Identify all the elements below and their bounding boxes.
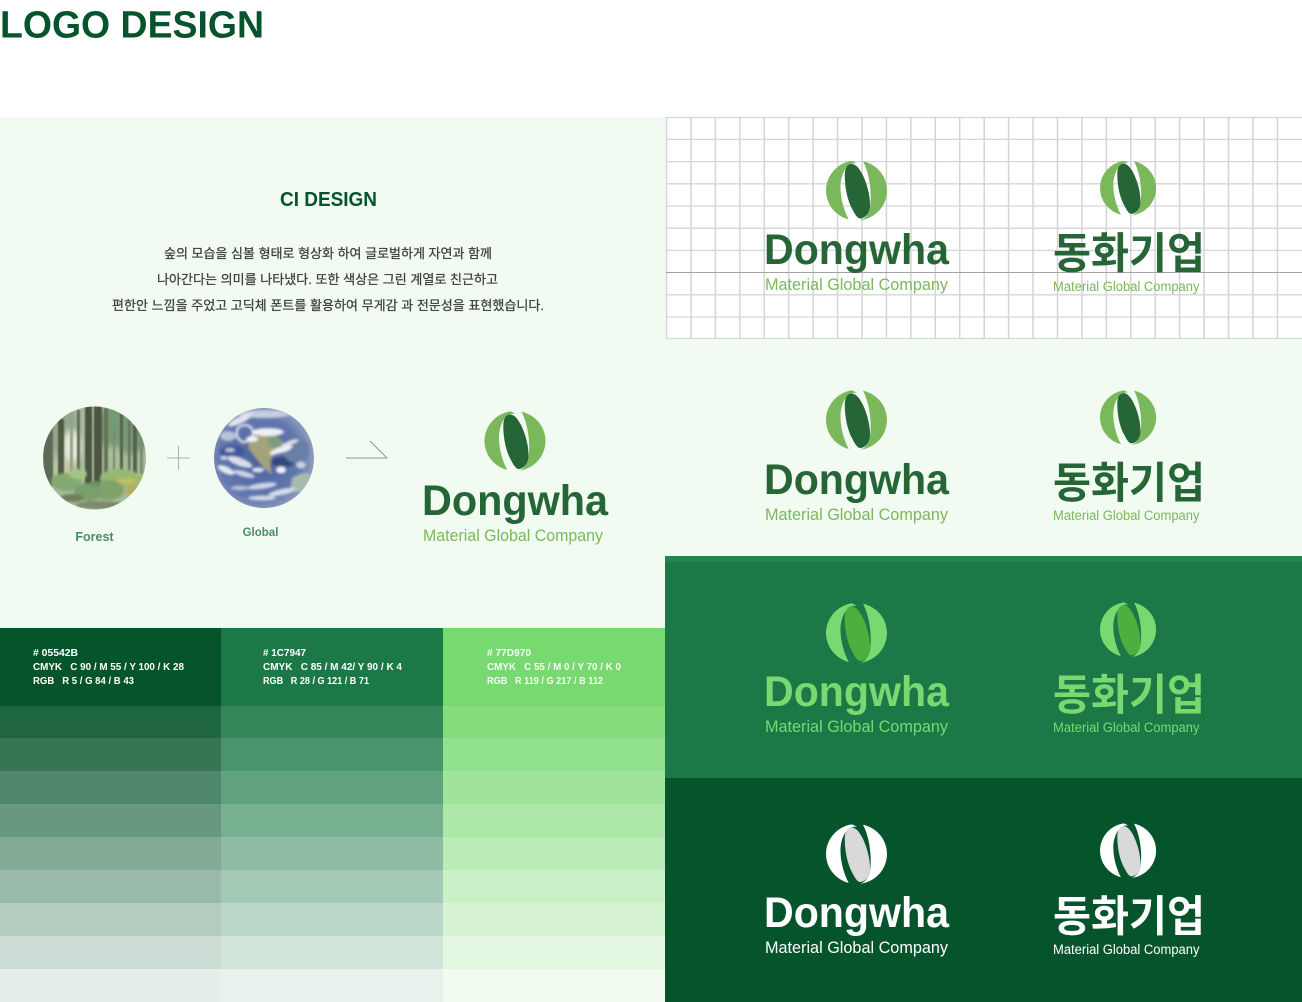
logo: korean on grid: 동화기업 [1053,230,1205,278]
label: forest: Forest [75,530,114,544]
logo: korean on mid green: Material Global Company [1053,720,1200,735]
panel: logo on pale green [665,339,1302,556]
logo: english on grid: Dongwha [764,226,950,274]
text block: description: 숲의 모습을 심볼 형태로 형상화 하여 글로벌하게 자연과 함께 [164,246,492,261]
logo: korean on pale green: 동화기업 [1053,460,1205,508]
swatch column: mid green: RGB R 28 / G 121 / B 71 [263,676,369,687]
swatch column: mid green: CMYK C 85 / M 42/ Y 90 / K 4 [263,662,402,673]
logo: korean on grid: Material Global Company [1053,279,1200,294]
logo: combined result [422,411,609,545]
text block: description: 나아간다는 의미를 나타냈다. 또한 색상은 그린 계열로 친근하고 [157,272,498,287]
logo: english on dark green [764,824,950,957]
logo: english on mid green: Dongwha [764,668,950,716]
logo: korean on dark green: Material Global Company [1053,942,1200,957]
swatch column: dark green: # 05542B [33,648,78,659]
text block: description: 편한안 느낌을 주었고 고딕체 폰트를 활용하여 무게감 과 전문성을 표현했습니다. [112,298,544,313]
logo: english on grid [764,161,950,294]
logo: korean on pale green: Material Global Company [1053,508,1200,523]
heading: CI design: CI DESIGN [280,189,377,211]
panel: CI design [0,117,665,628]
logo: combined result: Material Global Company [423,527,604,545]
panel: logo on mid green [665,556,1302,778]
logo: english on pale green [764,390,950,524]
image: earth [214,408,314,508]
text block: description [112,246,544,313]
swatch column: mid green [221,628,443,1002]
logo: korean on grid [1053,161,1205,294]
swatch column: light green [443,628,665,1002]
logo: korean on pale green [1053,390,1205,523]
swatch column: dark green: CMYK C 90 / M 55 / Y 100 / K 28 [33,662,184,673]
logo: korean on mid green [1053,602,1205,735]
icon: arrow [346,441,387,458]
panel: color palette [0,628,665,1002]
logo: english on pale green: Dongwha [764,456,950,504]
logo: korean on dark green [1053,823,1205,957]
swatch column: light green: CMYK C 55 / M 0 / Y 70 / K 0 [487,662,621,673]
logo: english on dark green: Material Global Company [765,939,949,957]
logo: english on mid green: Material Global Company [765,718,949,736]
logo: korean on dark green: 동화기업 [1053,894,1205,942]
swatch column: dark green: RGB R 5 / G 84 / B 43 [33,676,134,687]
logo: korean on mid green: 동화기업 [1053,672,1205,720]
swatch column: light green: # 77D970 [487,648,531,659]
title: LOGO DESIGN [0,4,264,46]
panel: logo on dark green [665,778,1302,1002]
swatch column: light green: RGB R 119 / G 217 / B 112 [487,676,603,687]
label: global: Global [243,527,278,539]
icon: plus [167,446,190,470]
image: forest [43,406,146,510]
logo: combined result: Dongwha [422,477,609,525]
swatch column: mid green: # 1C7947 [263,648,306,659]
logo: english on pale green: Material Global Company [765,506,949,524]
logo: english on dark green: Dongwha [764,889,950,937]
panel: logo on grid [666,117,1302,339]
logo: english on mid green [764,603,950,736]
swatch column: dark green [0,628,221,1002]
logo: english on grid: Material Global Company [765,276,949,294]
